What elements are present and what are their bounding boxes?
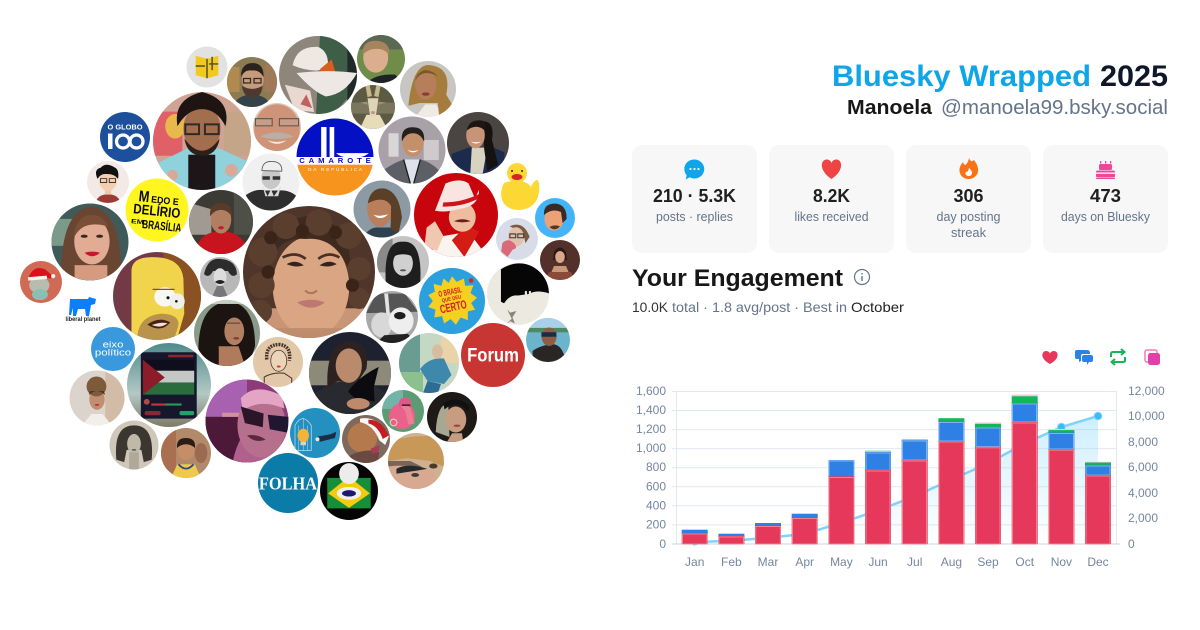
month labels: Oct <box>1015 555 1035 569</box>
month labels: Dec <box>1087 555 1109 569</box>
left y axis labels: 800 <box>646 460 666 474</box>
avatar: Eixo Político logo: político <box>95 348 131 358</box>
icon: flame <box>959 158 978 179</box>
icon: liberal planet cow logo: liberal planet <box>66 316 101 323</box>
avatar: woman with long blonde hair <box>400 61 456 117</box>
avatar: woman with red lipstick <box>51 204 128 280</box>
avatar: man seated in blue shirt <box>399 333 459 393</box>
right y axis labels: 6,000 <box>1128 460 1158 474</box>
avatar: child in yellow top <box>161 428 211 478</box>
avatar: Eixo Político logo: eixo <box>103 339 124 349</box>
panel: day posting streak stat: day posting <box>936 210 1001 224</box>
avatar: man in grey cardigan <box>378 116 446 184</box>
panel: posts and replies stat: posts · replies <box>656 210 733 224</box>
left y axis labels: 600 <box>646 480 666 494</box>
avatar: smiling woman in navy blazer <box>447 112 509 174</box>
user name and handle: Manoela <box>847 97 933 119</box>
avatar: Medo e Delírio em Brasília logo: DELÍRIO <box>133 200 181 221</box>
icon: chat bubble <box>684 159 704 180</box>
panel: days on Bluesky stat: days on Bluesky <box>1061 210 1151 224</box>
avatar: sepia sketch woman <box>253 337 303 387</box>
avatar: O Brasil que deu certo logo: QUE DEU <box>441 294 462 304</box>
avatar: Medo e Delírio em Brasília logo: EDO E <box>151 194 179 208</box>
panel: day posting streak stat: streak <box>951 226 987 240</box>
icon: reposts legend arrows <box>1111 349 1125 365</box>
avatar: Forum logo <box>461 323 525 387</box>
icon: quotes legend squares <box>1145 350 1160 365</box>
left y axis labels: 0 <box>659 537 666 551</box>
avatar: cartoon man on blue <box>535 198 575 238</box>
avatar: dreadlocks man smiling <box>354 180 410 238</box>
panel: likes received stat: likes received <box>794 210 869 224</box>
avatar: toilet on Brazil flag <box>320 462 378 520</box>
avatar: blond man outdoors <box>357 35 405 83</box>
right y axis labels: 0 <box>1128 537 1135 551</box>
avatar: Camarote da República logo: CAMAROTE <box>299 156 371 165</box>
user name and handle: @manoela99.bsky.social <box>941 97 1168 119</box>
avatar: woman with grey streaked hair <box>427 392 477 442</box>
avatar: small black and white portrait <box>200 257 240 297</box>
avatar: Folha logo: FOLHA <box>259 474 318 494</box>
icon: birthday cake <box>1096 161 1116 179</box>
avatar: Homer Simpson <box>113 252 203 340</box>
avatar: black and white man with cap <box>242 154 300 210</box>
avatar: man in floral shirt <box>153 92 253 194</box>
month labels: Jul <box>907 555 922 569</box>
left y axis labels: 400 <box>646 498 666 512</box>
avatar: red hat cartoon man <box>414 173 498 257</box>
avatar: black blob on cream <box>487 263 549 325</box>
month labels <box>685 555 1109 569</box>
panel: likes received stat: 8.2K <box>813 186 850 206</box>
month labels: Mar <box>758 555 778 569</box>
avatar: centre woman with curly hair <box>243 206 375 341</box>
avatar: Medo e Delírio em Brasília logo: EM <box>131 218 144 226</box>
right y axis labels: 10,000 <box>1128 409 1165 423</box>
icon: heart <box>822 160 841 179</box>
avatar: dog with Santa hat <box>342 415 390 463</box>
left y axis labels: 1,000 <box>636 441 666 455</box>
heading: your engagement: Your Engagement <box>632 265 843 292</box>
right y axis labels: 12,000 <box>1128 384 1165 398</box>
icon: info <box>854 270 870 284</box>
chart: monthly engagement stacked bars with cumulative line <box>636 384 1165 569</box>
avatar: painted woman portrait <box>540 240 580 280</box>
avatar: man with sunglasses by the sea <box>526 318 570 362</box>
engagement summary line: total · 1.8 avg/post · Best in <box>672 299 847 315</box>
month labels: Jan <box>685 555 704 569</box>
avatar bubble cluster <box>20 35 580 520</box>
avatar: Medo e Delírio em Brasília logo: M <box>138 188 150 206</box>
icon: replies legend bubbles <box>1075 350 1093 365</box>
left y axis labels <box>636 384 666 551</box>
month labels: May <box>830 555 853 569</box>
avatar: O Globo 100 logo: O GLOBO <box>108 122 143 132</box>
left y axis labels: 1,600 <box>636 384 666 398</box>
avatar: Folha logo <box>258 453 318 513</box>
icon: liberal planet cow logo <box>66 297 101 323</box>
chart legend icons <box>1042 349 1160 365</box>
avatar: curly haired woman <box>194 300 260 366</box>
avatar: pink cartoon creature <box>382 390 424 432</box>
avatar: older man with moustache <box>253 103 301 155</box>
stacked bars <box>682 394 1111 544</box>
panel: day posting streak stat: 306 <box>954 186 984 206</box>
avatar: woman with golden dog <box>388 433 444 489</box>
month labels: Feb <box>721 555 742 569</box>
panel: likes received stat <box>769 145 894 253</box>
avatar: man with sunglasses in purple light <box>206 380 288 462</box>
avatar: white goat <box>351 85 395 129</box>
left y axis labels: 200 <box>646 518 666 532</box>
avatar: bearded man with glasses <box>227 57 277 107</box>
avatar: O Brasil que deu certo logo: CERTO <box>439 297 468 316</box>
month labels: Sep <box>977 555 999 569</box>
panel: days on Bluesky stat: 473 <box>1090 186 1121 206</box>
avatar: lamp in cage illustration <box>290 408 340 458</box>
avatar: Forum logo: Forum <box>467 344 519 366</box>
month labels: Aug <box>941 555 962 569</box>
panel: days on Bluesky stat <box>1043 145 1168 253</box>
engagement summary line: October <box>851 299 904 315</box>
avatar: O Brasil que deu certo logo <box>419 268 485 334</box>
panel: day posting streak stat <box>906 145 1031 253</box>
avatar: goose with cloth <box>279 36 359 114</box>
left y axis labels: 1,400 <box>636 403 666 417</box>
avatar: Camarote da República logo <box>296 118 374 196</box>
avatar: Medo e Delírio em Brasília logo <box>126 178 188 242</box>
avatar: Eixo Político logo <box>91 327 135 371</box>
engagement summary line: 10.0K <box>632 299 669 315</box>
title: Bluesky Wrapped <box>832 60 1091 93</box>
avatar: woman holding black cat <box>309 332 391 414</box>
avatar: O Globo 100 logo <box>100 112 150 162</box>
month labels: Apr <box>795 555 814 569</box>
right y axis labels: 8,000 <box>1128 435 1158 449</box>
title: 2025 <box>1100 60 1168 93</box>
avatar: grayscale comic portrait <box>366 291 418 343</box>
engagement summary line <box>632 299 904 315</box>
right y axis labels: 4,000 <box>1128 486 1158 500</box>
cumulative area and line <box>691 412 1102 546</box>
panel: posts and replies stat <box>632 145 757 253</box>
avatar: woman with hair bun <box>70 370 124 426</box>
month labels: Jun <box>868 555 888 569</box>
avatar: Christmas toy <box>20 261 62 303</box>
avatar: cartoon man with glasses <box>87 161 129 203</box>
month labels: Nov <box>1051 555 1072 569</box>
avatar: black and white woman <box>377 236 429 288</box>
panel: posts and replies stat: 210 · 5.3K <box>653 186 736 206</box>
avatar: book logo <box>186 46 228 88</box>
avatar: O Brasil que deu certo logo: O BRASIL <box>438 285 463 299</box>
right y axis labels <box>1128 384 1165 551</box>
avatar: Palestine flag on phone screen <box>127 343 211 427</box>
avatar: person in red sweater <box>189 190 253 254</box>
user name and handle <box>847 97 1168 119</box>
right y axis labels: 2,000 <box>1128 511 1158 525</box>
left y axis labels: 1,200 <box>636 422 666 436</box>
avatar: woman with glasses covering mouth <box>496 218 538 260</box>
avatar: Medo e Delírio em Brasília logo: BRASÍLIA <box>141 216 182 235</box>
icon: likes legend heart <box>1042 351 1058 364</box>
icon: rubber duck <box>501 163 539 210</box>
avatar: Camarote da República logo: DA REPÚBLICA <box>308 166 363 172</box>
avatar: sepia curly portrait <box>110 420 158 470</box>
